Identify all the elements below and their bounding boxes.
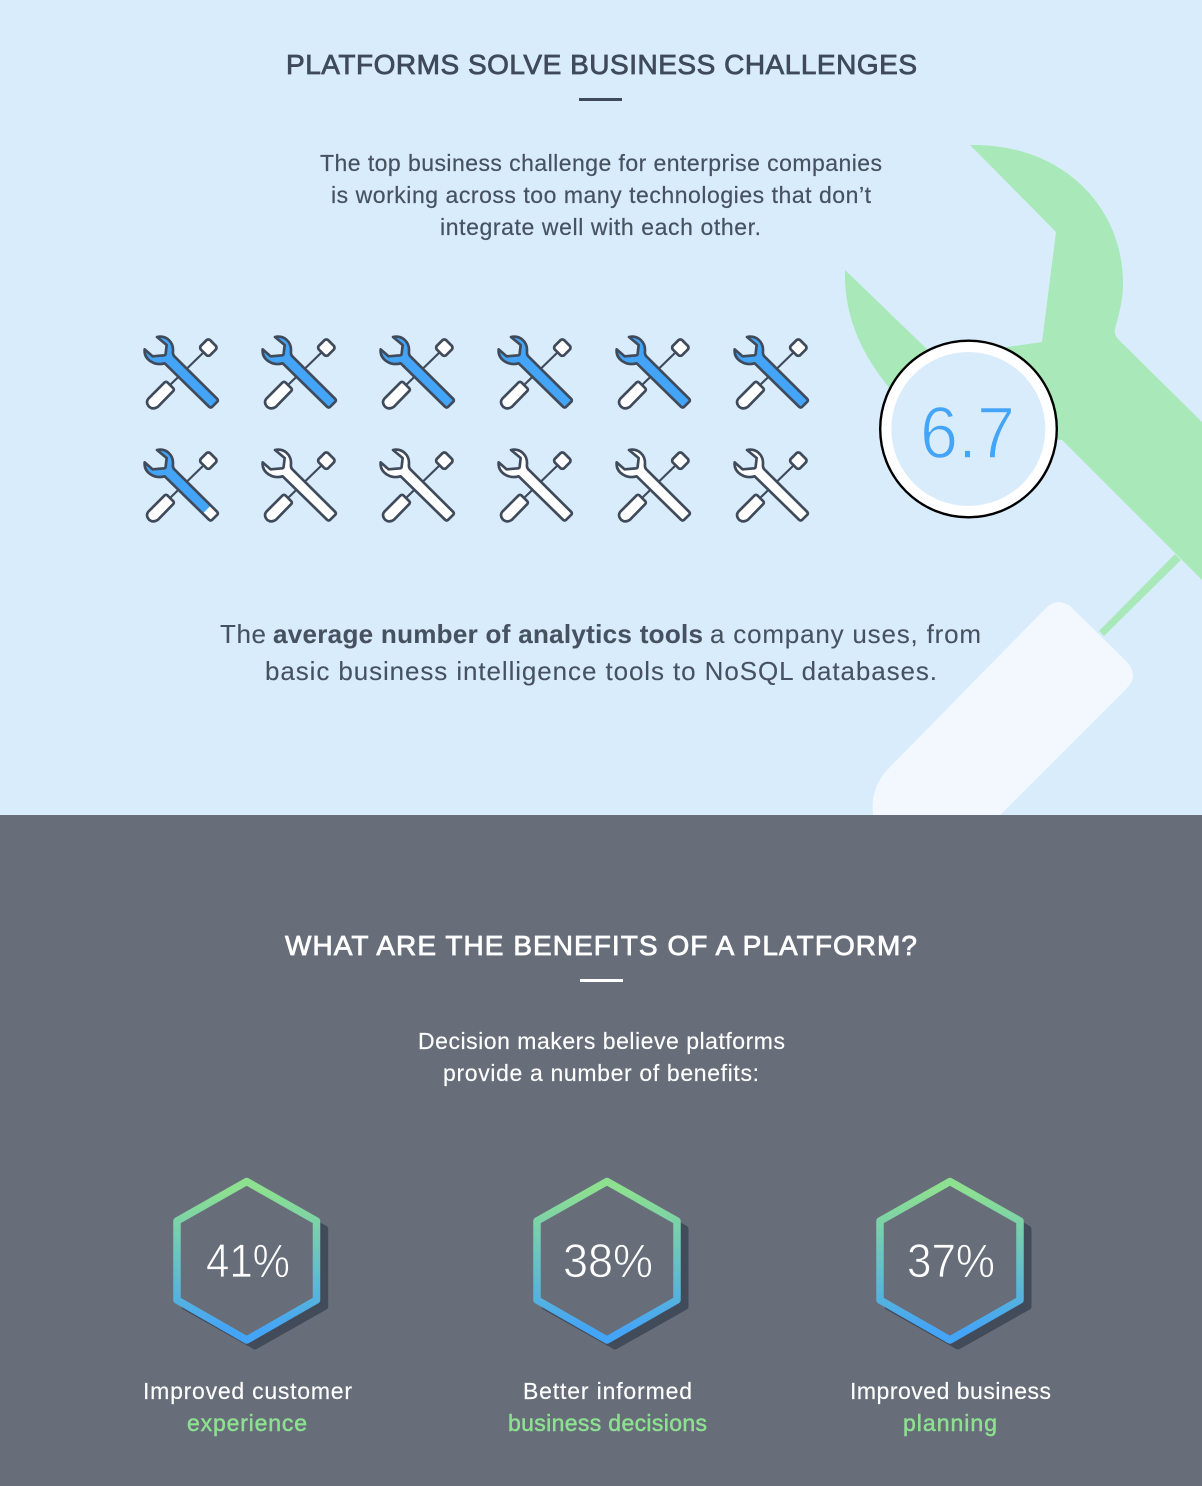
benefit: 37 percent improved business planning (850, 1182, 1051, 1436)
text block: average number of analytics tools: average number of analytics tools (273, 619, 703, 649)
statistic: 37% (907, 1234, 995, 1287)
illustration: large screwdriver handle (873, 602, 1133, 815)
icon: empty tools 1 (263, 450, 336, 521)
hexagon badge (880, 1182, 1028, 1346)
text block: intro: is working across too many technologies that don’t (331, 182, 872, 208)
text block: average number of analytics tools: The (220, 619, 266, 649)
icon: filled tools 6 (735, 337, 808, 408)
label (850, 1378, 1051, 1436)
callout: 6.7 circle: 6.7 (920, 393, 1015, 474)
text block: average number of analytics tools: a company uses, from (710, 619, 981, 649)
icon: filled tools 3 (381, 337, 454, 408)
hexagon badge (537, 1182, 685, 1346)
statistic: 38% (563, 1234, 653, 1287)
icon: empty tools 3 (499, 450, 572, 521)
illustration: large screwdriver shaft (1099, 554, 1181, 636)
label: Improved business (850, 1378, 1051, 1404)
text block: average number of analytics tools: basic business intelligence tools to NoSQL databases. (265, 656, 937, 686)
benefit: 38 percent better informed business decisions (508, 1182, 707, 1436)
benefit: 41 percent improved customer experience (143, 1182, 352, 1436)
text block: decision makers (418, 1028, 785, 1086)
icon: empty tools 5 (735, 450, 808, 521)
text block: decision makers: Decision makers believe platforms (418, 1028, 785, 1054)
label: business decisions (508, 1410, 707, 1436)
icon: filled tools 4 (499, 337, 572, 408)
label (143, 1378, 352, 1436)
title: what are the benefits of a platform: WHAT ARE THE BENEFITS OF A PLATFORM? (285, 930, 917, 961)
title: platforms solve business challenges: PLATFORMS SOLVE BUSINESS CHALLENGES (286, 49, 917, 80)
text block: intro: integrate well with each other. (440, 214, 761, 240)
icon grid: 6.7 tools out of 12 (145, 337, 808, 521)
panel: challenges background (0, 0, 1202, 815)
illustration: large wrench (845, 145, 1202, 580)
icon: empty tools 4 (617, 450, 690, 521)
text block: decision makers: provide a number of benefits: (443, 1060, 759, 1086)
icon: partially filled tools (145, 450, 218, 521)
title underline (579, 98, 622, 101)
title underline (580, 979, 623, 982)
panel: benefits background (0, 815, 1202, 1486)
label: Improved customer (143, 1378, 352, 1404)
hexagon badge (177, 1182, 325, 1346)
statistic: 41% (206, 1234, 290, 1287)
icon: filled tools 5 (617, 337, 690, 408)
icon: empty tools 2 (381, 450, 454, 521)
label: Better informed (523, 1378, 692, 1404)
text block: intro (320, 150, 882, 240)
icon: filled tools 1 (145, 337, 218, 408)
text block: intro: The top business challenge for enterprise companies (320, 150, 882, 176)
label: planning (903, 1410, 997, 1436)
label: experience (187, 1410, 307, 1436)
label (508, 1378, 707, 1436)
icon: filled tools 2 (263, 337, 336, 408)
callout: 6.7 circle (880, 341, 1057, 517)
text block: average number of analytics tools (220, 619, 981, 686)
